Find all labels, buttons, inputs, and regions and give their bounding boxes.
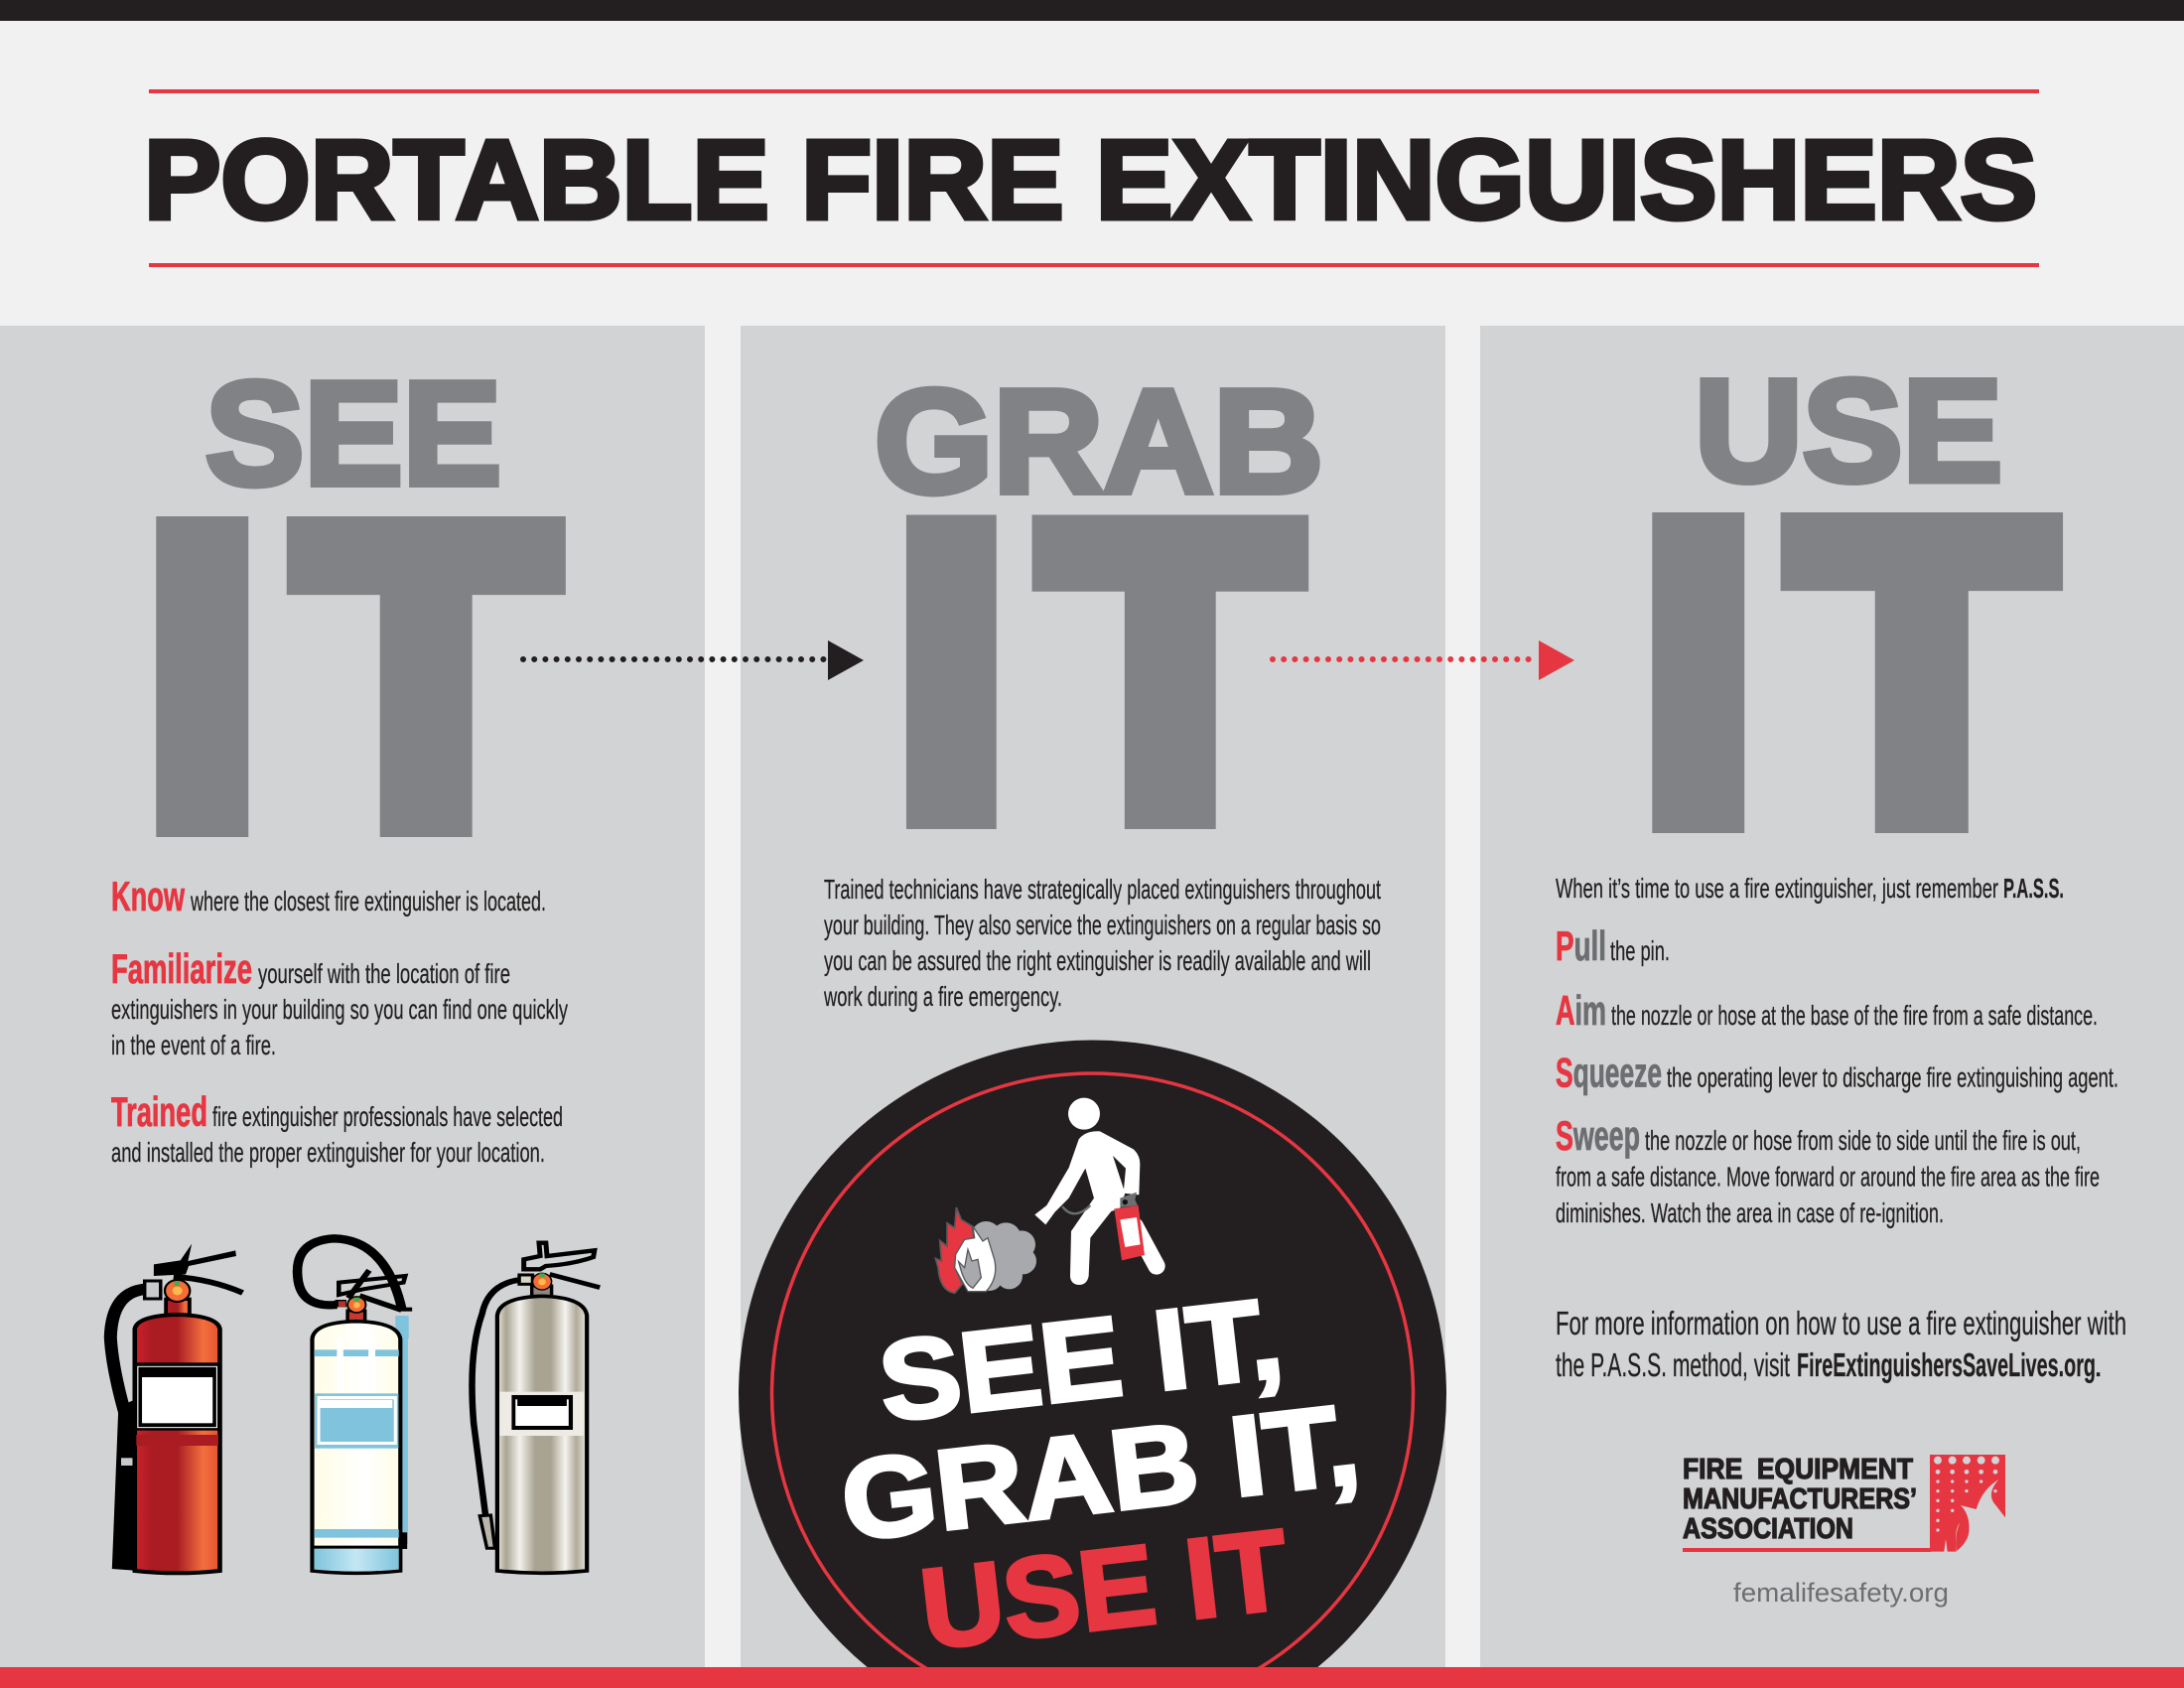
text block: pass steps: diminishes. Watch the area in case of re-ignition. — [1556, 1197, 1944, 1228]
title block — [144, 89, 2039, 267]
panel: see it — [0, 326, 705, 1667]
arrow: see to grab — [523, 640, 864, 680]
icon: red extinguisher — [110, 1244, 242, 1573]
panel: grab it — [739, 326, 1446, 1688]
text block: trained technicians: you can be assured the right extinguisher is readily available and will — [824, 945, 1371, 976]
logo website: femalifesafety.org — [1733, 1578, 1949, 1608]
arrow: grab to use — [1273, 640, 1574, 680]
icon: fire and smoke — [935, 1207, 1036, 1293]
logo: fire equipment manufacturers' association: ASSOCIATION — [1683, 1513, 1853, 1545]
text block: pass steps: Pull — [1556, 922, 1606, 969]
logo: fire equipment manufacturers' association — [1683, 1454, 2005, 1608]
text block: pass steps: Squeeze — [1556, 1049, 1662, 1096]
text block: more information — [1556, 1305, 2126, 1383]
panel: use it — [1480, 326, 2184, 1667]
text block: know, familiarize, trained: Familiarize — [111, 945, 252, 992]
heading: use it: USE — [1695, 350, 2002, 511]
text block: know, familiarize, trained: extinguishers in your building so you can find one quickly — [111, 994, 568, 1025]
text block: know, familiarize, trained: Know — [111, 873, 185, 919]
icons: three fire extinguishers — [110, 1238, 600, 1573]
text block: know, familiarize, trained — [111, 873, 568, 1168]
logo: fire equipment manufacturers' association: FIRE EQUIPMENT — [1683, 1454, 1913, 1485]
text block: pass steps — [1556, 873, 2118, 1228]
text block: trained technicians: work during a fire emergency. — [823, 981, 1062, 1012]
top black bar — [0, 0, 2184, 21]
text block: more information: . — [2094, 1346, 2103, 1383]
text block: trained technicians: your building. They also service the extinguishers on a regular basis so — [824, 910, 1381, 940]
badge slogan: USE IT — [914, 1506, 1294, 1673]
badge slogan — [845, 1299, 1357, 1648]
icon: water extinguisher — [298, 1238, 412, 1573]
text block: pass steps: Sweep — [1556, 1112, 1640, 1159]
badge slogan: GRAB IT, — [835, 1381, 1365, 1565]
heading: use it — [1640, 350, 2051, 907]
text block: trained technicians — [823, 874, 1381, 1012]
text block: know, familiarize, trained: where the closest fire extinguisher is located. — [190, 886, 546, 916]
text block: trained technicians: Trained technicians have strategically placed extinguishers throughout — [824, 874, 1381, 905]
badge: see it, grab it, use it — [739, 1041, 1446, 1688]
heading: see it: T — [298, 441, 554, 911]
text block: know, familiarize, trained: and installed the proper extinguisher for your location. — [111, 1137, 545, 1168]
heading: see it: I — [144, 441, 261, 911]
heading: grab it: T — [1042, 442, 1297, 902]
text block: know, familiarize, trained: fire extinguisher professionals have selected — [212, 1101, 563, 1132]
text block: more information: the P.A.S.S. method, visit — [1556, 1346, 1790, 1383]
icon: logo flame mark — [1930, 1455, 2005, 1552]
heading: see it: SEE — [205, 352, 501, 516]
text block: pass steps: the pin. — [1610, 935, 1670, 966]
text block: know, familiarize, trained: Trained — [111, 1088, 207, 1135]
text block: pass steps: P.A.S.S. — [2003, 873, 2064, 904]
badge slogan: SEE IT, — [873, 1275, 1289, 1446]
title block: PORTABLE FIRE EXTINGUISHERS — [144, 117, 2037, 242]
heading: grab it: I — [894, 441, 1009, 902]
icon: silver extinguisher — [472, 1243, 600, 1573]
logo: fire equipment manufacturers' association: MANUFACTURERS’ — [1683, 1483, 1917, 1515]
text block: pass steps: Aim — [1556, 987, 1606, 1034]
text block: know, familiarize, trained: yourself with the location of fire — [258, 958, 510, 989]
heading: grab it: GRAB — [875, 359, 1323, 524]
heading: see it — [144, 352, 554, 911]
heading: use it: T — [1792, 438, 2051, 907]
text block: know, familiarize, trained: in the event of a fire. — [111, 1030, 276, 1060]
heading: grab it — [875, 359, 1323, 902]
bottom red bar — [0, 1667, 2184, 1688]
heading: use it: I — [1640, 437, 1757, 907]
icon: person carrying extinguisher toward fire — [935, 1098, 1157, 1293]
